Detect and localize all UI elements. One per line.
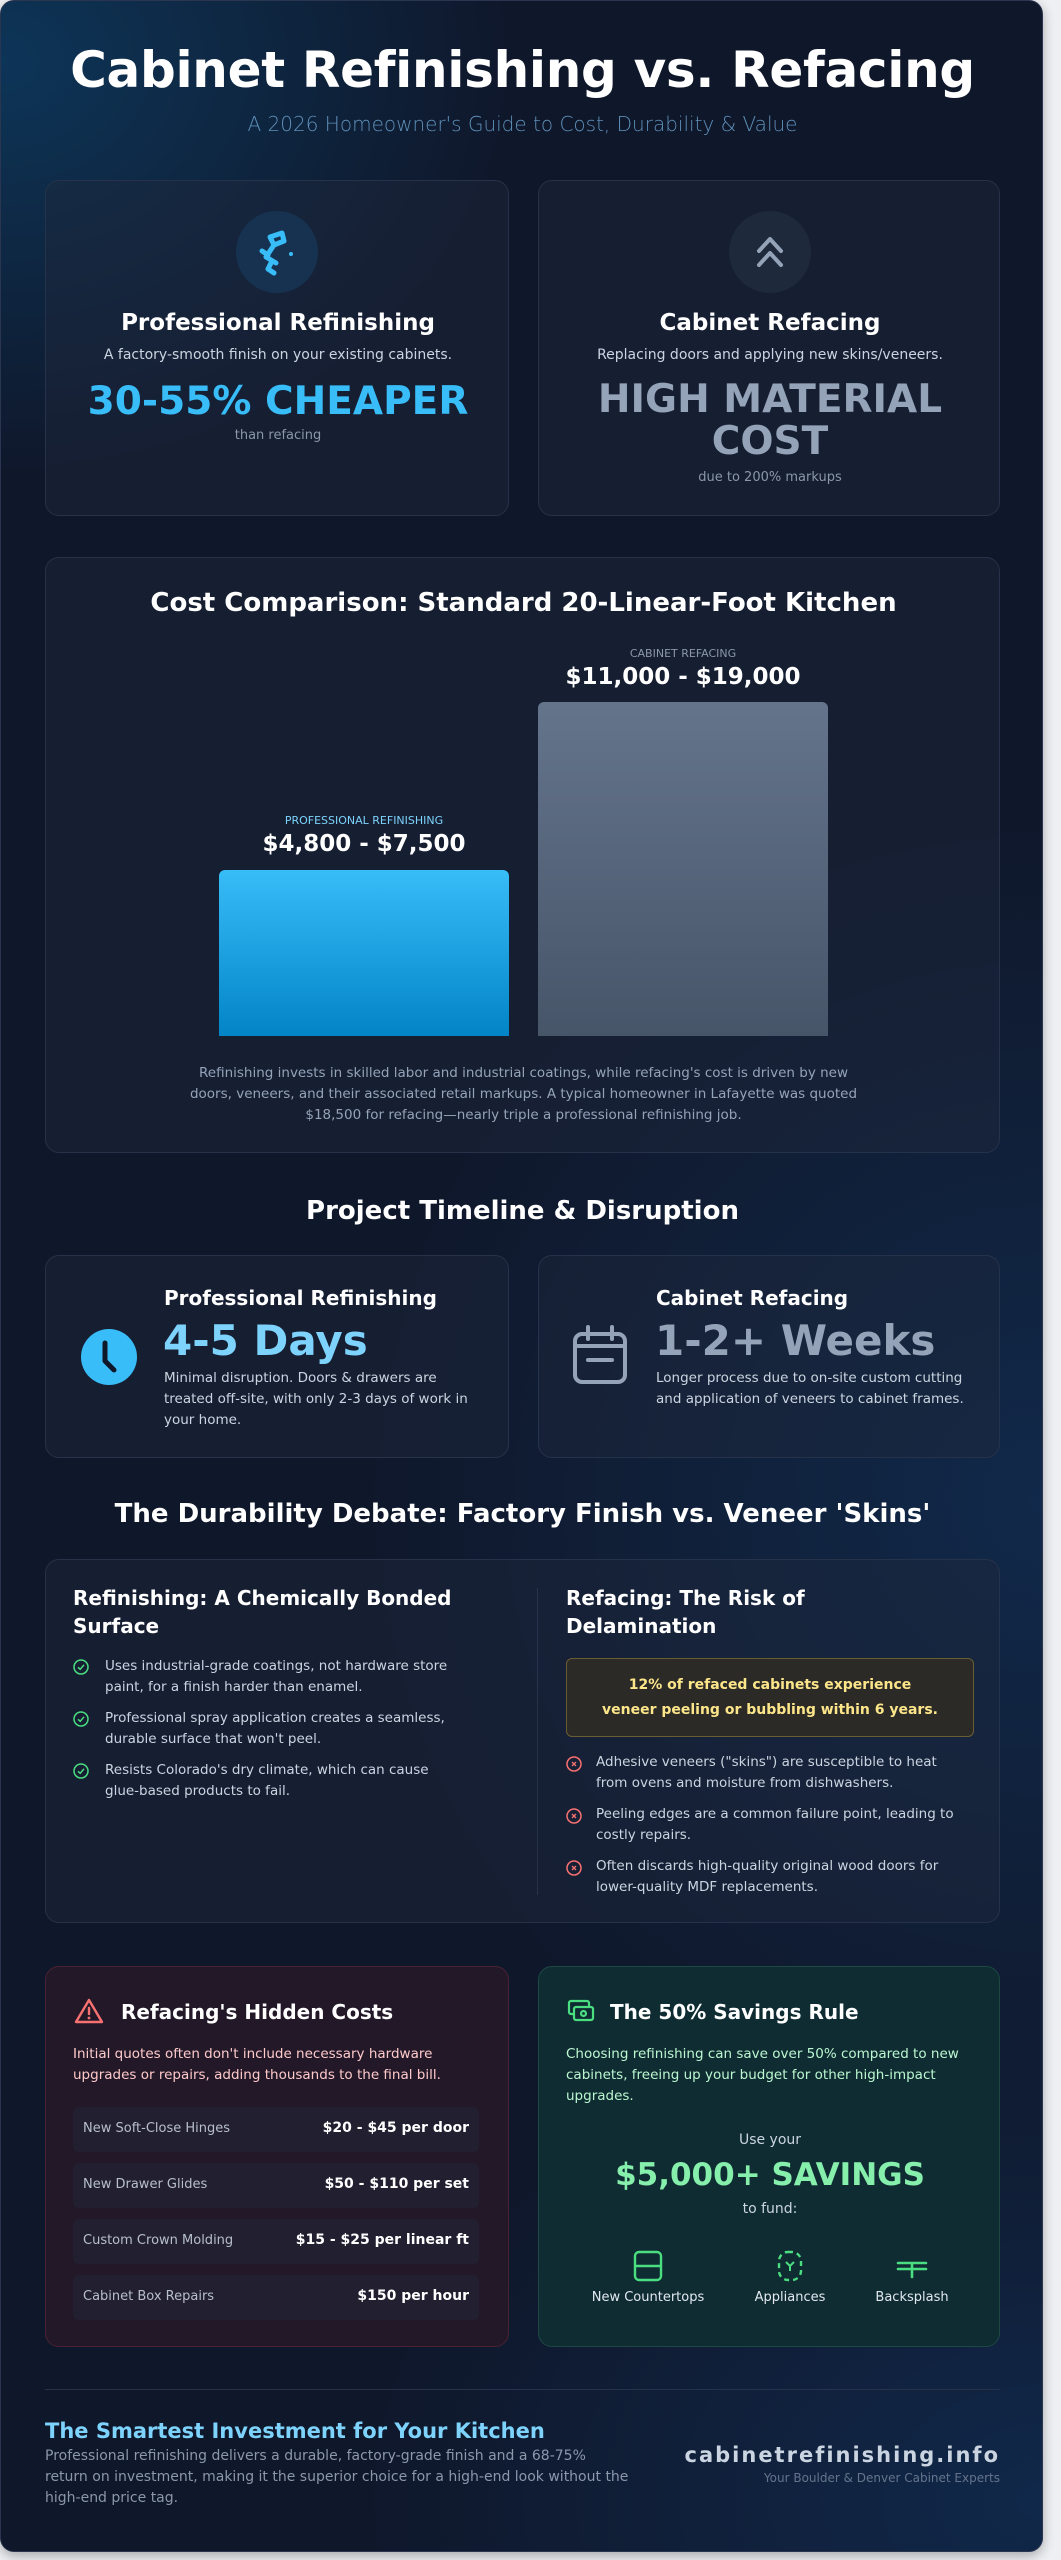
bar: refacing: CABINET REFACING [630,647,736,660]
icon: backsplash: Backsplash [875,2290,949,2305]
bar: refacing: $11,000 - $19,000 [565,664,801,690]
cost rows: $15 - $25 per linear ft [296,2232,469,2248]
description: Minimal disruption. Doors & drawers are treated off-site, with only 2-3 days of work in your home. [164,1370,468,1428]
panel: savings rule [538,1966,1000,2347]
heading: Refacing's Hidden Costs [121,2000,393,2024]
bar: refinishing [219,814,509,1036]
column: refinishing [73,1586,452,1799]
panel: refacing timeline [538,1255,1000,1458]
heading: The 50% Savings Rule [610,2000,859,2024]
footer: summary [45,2419,628,2506]
bar: refinishing: $4,800 - $7,500 [262,831,466,857]
heading: Refinishing: A Chemically Bonded Surface [73,1586,452,1638]
cost rows: New Soft-Close Hinges [83,2121,230,2136]
icon: appliances: Appliances [755,2290,825,2305]
list: Uses industrial-grade coatings, not hardware store paint, for a finish harder than enamel. [105,1658,447,1695]
callout: 12% of refaced cabinets experience [629,1677,911,1693]
heading: durability: The Durability Debate: Factory Finish vs. Veneer 'Skins' [115,1499,930,1529]
panel: hidden costs [45,1966,509,2347]
description: Longer process due to on-site custom cutting and application of veneers to cabinet frames. [656,1370,964,1407]
panel: cost comparison [45,557,1000,1153]
heading: Professional Refinishing [164,1286,437,1310]
icon: clock [81,1329,137,1385]
cost rows: $50 - $110 per set [325,2176,469,2192]
list [566,1754,954,1895]
cost rows: $150 per hour [357,2288,469,2304]
footer: brand: Your Boulder & Denver Cabinet Experts [764,2471,1000,2485]
description: Replacing doors and applying new skins/veneers. [597,347,943,363]
heading: Cost Comparison: Standard 20-Linear-Foot Kitchen [150,588,897,618]
column: refacing [566,1586,974,1895]
cost rows [83,2120,469,2304]
footnote: Refinishing invests in skilled labor and industrial coatings, while refacing's cost is driven by new doors, veneers, and their associated retail markups. A typical homeowner in Lafayette was quoted $18,500 for refacing—nearly triple a professional refinishing job. [190,1065,857,1123]
icon: calendar [573,1325,627,1384]
footer: brand [685,2443,1000,2485]
callout [566,1658,974,1737]
heading: timeline: Project Timeline & Disruption [306,1196,739,1226]
callout: savings [615,2132,925,2217]
cost rows: Custom Crown Molding [83,2233,233,2248]
icon: warning [74,1998,104,2024]
callout: savings: to fund: [743,2201,797,2217]
icon: countertops [592,2250,704,2305]
callout: savings: $5,000+ SAVINGS [615,2157,925,2193]
heading: Cabinet Refacing [656,1286,848,1310]
bar: refinishing: PROFESSIONAL REFINISHING [285,814,443,827]
stat note: than refacing [235,428,321,443]
icon: backsplash [875,2262,949,2305]
list: Often discards high-quality original wood doors for lower-quality MDF replacements. [596,1858,938,1895]
icon: spray gun [236,211,318,293]
list: Adhesive veneers ("skins") are susceptible to heat from ovens and moisture from dishwashers. [596,1754,937,1791]
heading: Refacing: The Risk of Delamination [566,1586,805,1638]
stat note: due to 200% markups [698,470,842,485]
list [73,1658,447,1799]
stat: 4-5 Days [163,1316,368,1365]
panel: refinishing timeline [45,1255,509,1458]
description: A factory-smooth finish on your existing cabinets. [104,347,452,363]
callout: veneer peeling or bubbling within 6 years. [602,1702,938,1718]
icon: appliances [754,2250,825,2305]
title: Cabinet Refinishing vs. Refacing [70,41,975,99]
footer: summary: Professional refinishing delivers a durable, factory-grade finish and a 68-75% return on investment, making it the superior choice for a high-end look without the high-end price tag. [45,2448,628,2506]
heading: Professional Refinishing [121,310,435,336]
cost rows: Cabinet Box Repairs [83,2289,214,2304]
stat: 30-55% CHEAPER [88,379,468,424]
stat: 1-2+ Weeks [655,1316,935,1365]
list: Resists Colorado's dry climate, which can cause glue-based products to fail. [105,1762,429,1799]
subtitle: A 2026 Homeowner's Guide to Cost, Durability & Value [248,112,797,136]
description: Choosing refinishing can save over 50% compared to new cabinets, freeing up your budget for other high-impact upgrades. [566,2046,959,2104]
bar chart [219,647,828,1036]
list: Professional spray application creates a seamless, durable surface that won't peel. [105,1710,445,1747]
stat: HIGH MATERIAL COST [598,377,942,464]
panel: durability [45,1559,1000,1923]
panel: professional refinishing summary [45,180,509,516]
footer: brand: cabinetrefinishing.info [685,2443,1000,2467]
callout: savings: Use your [739,2132,801,2148]
icon: double chevron [729,211,811,293]
heading: Cabinet Refacing [660,310,880,336]
description: Initial quotes often don't include necessary hardware upgrades or repairs, adding thousands to the final bill. [73,2046,441,2083]
icon: countertops: New Countertops [592,2290,704,2305]
cost rows: New Drawer Glides [83,2177,207,2192]
footer: summary: The Smartest Investment for Your Kitchen [45,2419,545,2443]
panel: cabinet refacing summary [538,180,1000,516]
bar: refacing [538,647,828,1036]
list: Peeling edges are a common failure point, leading to costly repairs. [596,1806,954,1843]
icon: cash [568,2000,594,2022]
cost rows: $20 - $45 per door [323,2120,469,2136]
